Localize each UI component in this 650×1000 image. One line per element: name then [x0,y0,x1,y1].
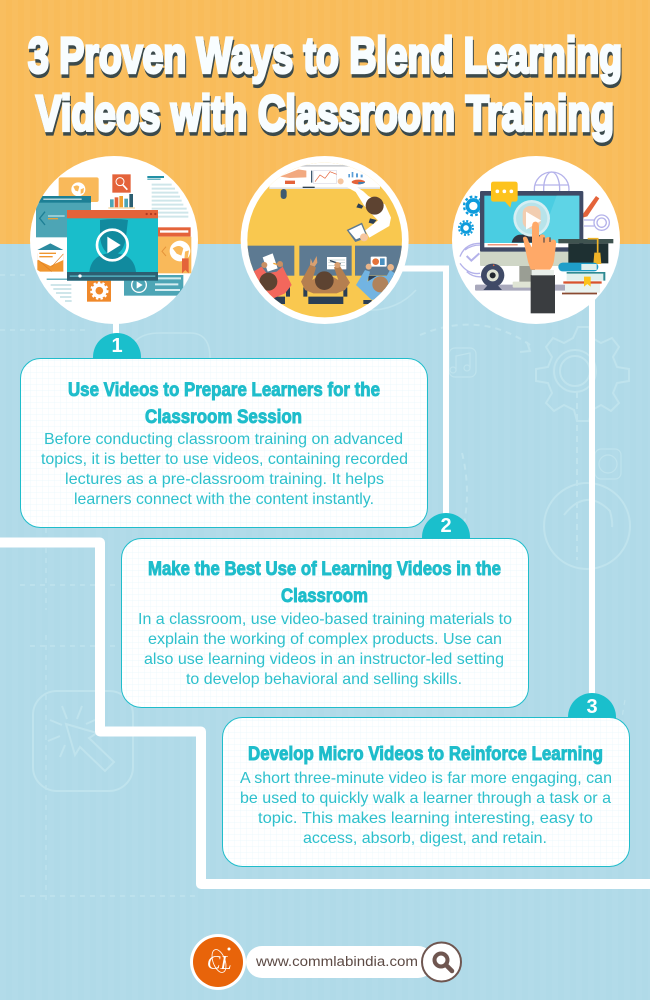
text: step 3 body: access, absorb, digest, and retain. [303,830,547,847]
text: step 3 body: be used to quickly walk a learner through a task or a [240,790,611,807]
step 1 number badge [93,333,141,381]
connector lines [0,268,650,884]
text: step 3 body [240,770,612,847]
text: step 3 body: topic. This makes learning interesting, easy to [258,810,593,827]
text: step 1 body [41,431,408,508]
panel: step 2 [122,538,528,708]
image circle 3: online video and books [452,156,620,324]
heading: step 1: Use Videos to Prepare Learners for the [68,380,380,401]
image circle 2: classroom seen from above [241,156,409,324]
icon: CommLab logo [190,934,246,990]
icon: CommLab logo: CL [207,952,231,974]
text: step 1 body: learners connect with the content instantly. [74,491,374,508]
text: step 1 body: Before conducting classroom training on advanced [44,431,403,448]
text: step 2 body: explain the working of complex products. Use can [148,631,502,648]
text: step 3 body: A short three-minute video is far more engaging, can [240,770,612,787]
step 2 number badge: 2 [440,515,452,537]
icon: search magnifier [422,942,461,982]
image circle 1: video learning [30,156,198,324]
text: step 2 body: to develop behavioral and selling skills. [186,671,462,688]
text: step 1 body: lectures as a pre-classroom training. It helps [65,471,384,488]
step 3 number badge: 3 [586,696,598,718]
heading: step 1 [68,380,380,428]
panel: step 3 [222,718,630,866]
heading: step 2 [148,559,501,607]
step 3 number badge [568,693,616,741]
heading: step 2: Make the Best Use of Learning Videos in the [148,559,501,580]
text: step 2 body: also use learning videos in an instructor-led setting [144,651,504,668]
title [28,28,623,145]
step 2 number badge [422,513,470,561]
text: step 2 body [138,611,512,688]
text: step 2 body: In a classroom, use video-based training materials to [138,611,512,628]
step 1 number badge: 1 [111,335,123,357]
heading: step 2: Classroom [281,586,368,607]
panel: step 1 [20,358,428,528]
heading: step 1: Classroom Session [145,407,302,428]
faint background icons [0,275,630,900]
footer: website address bar [246,946,434,978]
heading: step 3: Develop Micro Videos to Reinforce Learning [248,744,603,765]
footer: website address bar: www.commlabindia.com [255,954,418,969]
text: step 1 body: topics, it is better to use videos, containing recorded [41,451,408,468]
